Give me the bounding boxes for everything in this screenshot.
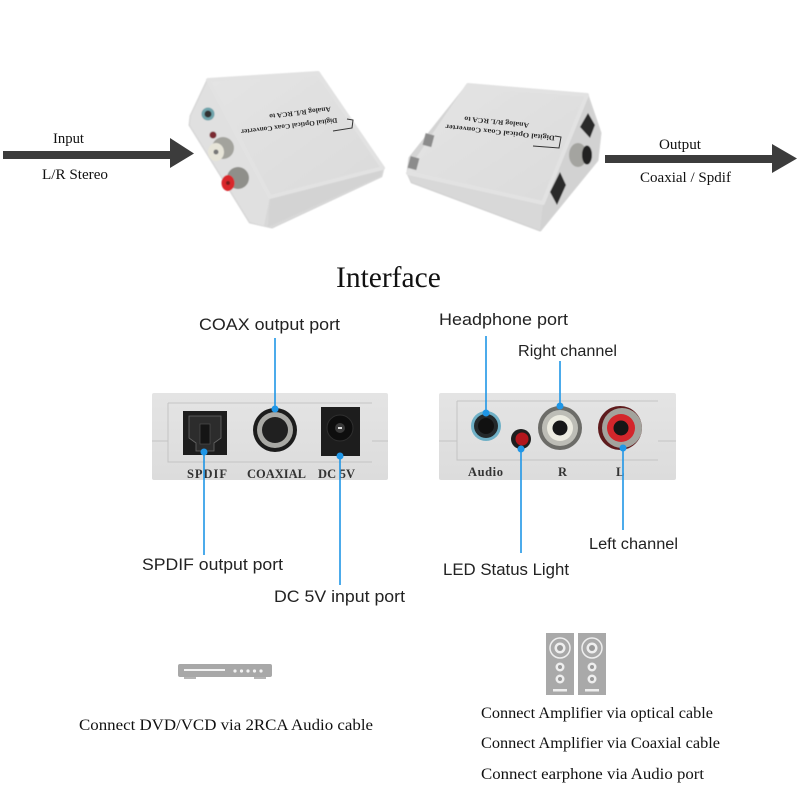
text: amplifier coaxial: Connect Amplifier via Coaxial cable	[481, 735, 720, 752]
callout: LED status light	[443, 446, 569, 579]
icon: audio jack	[471, 411, 501, 441]
device: output side view	[408, 85, 600, 230]
arrow: output	[605, 144, 797, 173]
callout: SPDIF output port	[142, 448, 283, 574]
panel: input ports	[439, 393, 676, 480]
label: DC 5V: DC 5V	[318, 467, 355, 481]
text: DVD connection: Connect DVD/VCD via 2RCA Audio cable	[79, 717, 373, 734]
text: earphone: Connect earphone via Audio port	[481, 766, 705, 783]
label: output: Output	[659, 137, 701, 153]
label: SPDIF: SPDIF	[187, 467, 227, 481]
label: COAXIAL: COAXIAL	[247, 467, 306, 481]
heading: interface: Interface	[336, 262, 441, 294]
device: output side view: Analog R/L RCA to	[463, 114, 529, 129]
callout: headphone port: Headphone port	[439, 310, 568, 329]
callout: DC 5V input port: DC 5V input port	[274, 587, 405, 606]
label: Audio: Audio	[468, 465, 503, 479]
callout: COAX output port	[199, 315, 340, 412]
callout: LED status light: LED Status Light	[443, 561, 569, 579]
arrow: input	[3, 138, 194, 168]
icon: SPDIF port	[183, 411, 227, 455]
label: L: L	[616, 465, 624, 479]
device: input side view: Digital Optical Coax Converter	[240, 116, 338, 136]
panel: output ports	[152, 393, 388, 481]
icon: coaxial port	[253, 408, 297, 452]
label: input: Input	[53, 131, 84, 147]
label: coaxial / spdif: Coaxial / Spdif	[640, 170, 731, 186]
callout: SPDIF output port: SPDIF output port	[142, 555, 283, 574]
callout: left channel	[589, 444, 678, 553]
icon: DVD player	[178, 664, 272, 679]
icon: left RCA	[598, 406, 642, 450]
device: input side view: Analog R/L RCA to	[268, 105, 331, 120]
icon: LED	[511, 429, 531, 449]
callout: right channel	[518, 343, 617, 410]
callout: right channel: Right channel	[518, 343, 617, 360]
callout: COAX output port: COAX output port	[199, 315, 340, 334]
icon: right RCA	[538, 406, 582, 450]
icon: DC port	[321, 407, 360, 456]
callout: DC 5V input port	[274, 452, 405, 606]
label: R: R	[558, 465, 568, 479]
icon: speakers	[546, 633, 606, 695]
device: input side view	[190, 73, 383, 227]
text: amplifier optical: Connect Amplifier via optical cable	[481, 705, 713, 722]
callout: left channel: Left channel	[589, 536, 678, 553]
label: L/R stereo: L/R Stereo	[42, 167, 108, 183]
callout: headphone port	[439, 310, 568, 416]
device: output side view: Digital Optical Coax Converter	[445, 123, 555, 142]
